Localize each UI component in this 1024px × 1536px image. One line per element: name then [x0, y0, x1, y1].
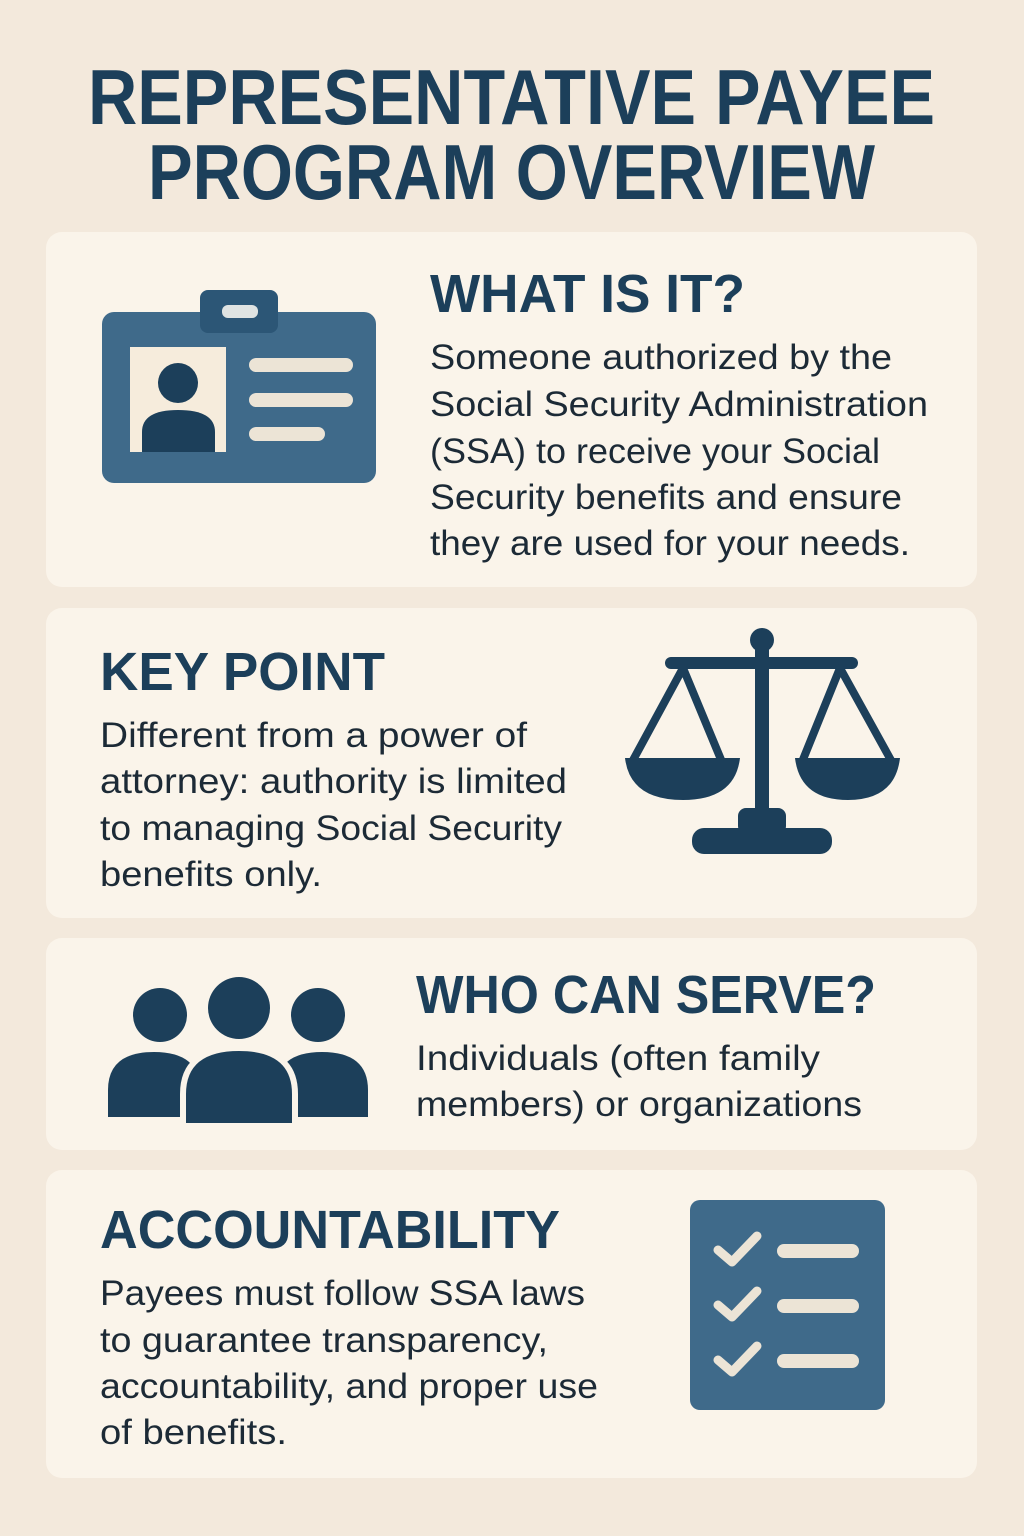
- text: accountability: to guarantee transparency,: [100, 1321, 548, 1360]
- heading: accountability: ACCOUNTABILITY: [100, 1200, 560, 1260]
- text: definition: Social Security Administration: [430, 385, 928, 424]
- text: definition: they are used for your needs.: [430, 524, 910, 563]
- text: definition: (SSA) to receive your Social: [430, 432, 880, 471]
- text: key point: [100, 716, 567, 894]
- text: key point: Different from a power of: [100, 716, 527, 755]
- heading: key point: KEY POINT: [100, 642, 385, 702]
- text: definition: [430, 338, 928, 563]
- heading: who can serve: WHO CAN SERVE?: [416, 965, 876, 1025]
- icon: ID card: [102, 290, 376, 483]
- panel: what is it: [46, 232, 977, 587]
- text: accountability: Payees must follow SSA laws: [100, 1274, 585, 1313]
- heading: what is it: WHAT IS IT?: [430, 264, 745, 324]
- title: PROGRAM OVERVIEW: [148, 128, 875, 216]
- icon: scales: [625, 628, 900, 854]
- title: [88, 53, 935, 216]
- text: key point: benefits only.: [100, 855, 322, 894]
- panel: accountability: [46, 1170, 977, 1478]
- text: key point: to managing Social Security: [100, 809, 563, 848]
- text: accountability: [100, 1274, 598, 1452]
- text: who can serve: [416, 1039, 862, 1124]
- text: accountability: of benefits.: [100, 1413, 287, 1452]
- text: key point: attorney: authority is limited: [100, 762, 567, 801]
- text: who can serve: Individuals (often family: [416, 1039, 821, 1078]
- text: definition: Security benefits and ensure: [430, 478, 902, 517]
- panel: who can serve: [46, 938, 977, 1150]
- icon: checklist: [690, 1200, 885, 1410]
- text: who can serve: members) or organizations: [416, 1085, 862, 1124]
- icon: people: [108, 974, 368, 1126]
- text: accountability: accountability, and proper use: [100, 1367, 598, 1406]
- text: definition: Someone authorized by the: [430, 338, 892, 377]
- panel: key point: [46, 608, 977, 918]
